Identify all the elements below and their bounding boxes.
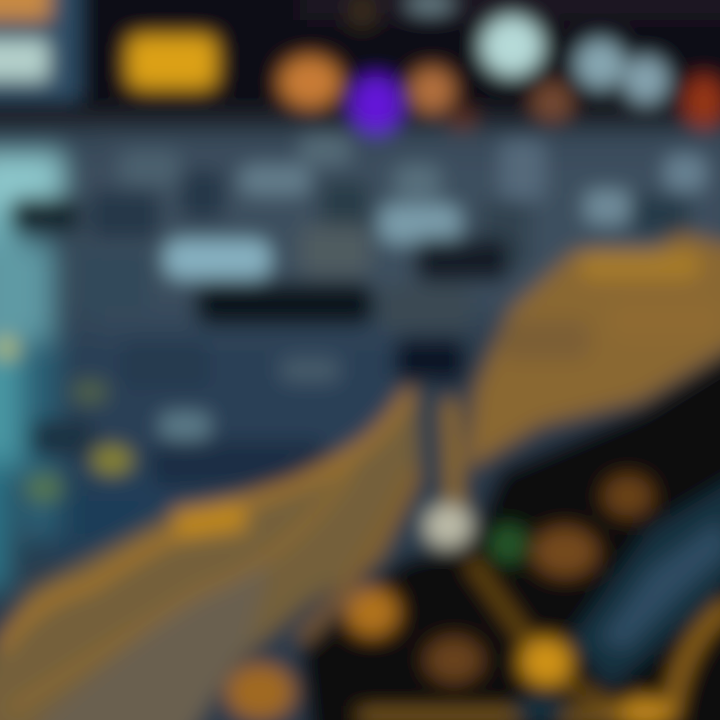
icon: orange light [280, 57, 340, 107]
icon: yellow light [128, 36, 216, 88]
icons: lower right orange dots [226, 476, 671, 720]
icon: purple light [351, 76, 401, 134]
panel: blue pipe [570, 470, 720, 690]
panel: gold diagonal lower left [0, 385, 420, 720]
panel: top band haze [0, 0, 720, 130]
icon: green spot [490, 526, 526, 562]
panel: gold right mass [465, 232, 720, 470]
icons: yellow flecks on left [0, 336, 132, 502]
panel: gold highlights right [500, 250, 720, 360]
icon: pale white light [482, 17, 542, 75]
icon: orange light 2 [410, 68, 454, 112]
icon: dim top lights [348, 0, 454, 28]
icon: red-brown light [448, 108, 476, 132]
panel: top dark band [0, 0, 720, 126]
icon: white spot [425, 505, 471, 547]
panel: brown bottom left [40, 560, 270, 720]
panel: dark lower right [300, 340, 720, 720]
panel: slate middle area [50, 130, 720, 570]
icon: red light right [684, 76, 720, 128]
panel: cyan left edge [0, 150, 65, 590]
panel: mottled patches in slate area [10, 135, 705, 488]
icon: top left screen [0, 0, 80, 100]
panel: dark blue lower edge [514, 696, 566, 720]
chart: gold streaks [0, 390, 720, 720]
icon: pale pair of lights [576, 40, 668, 103]
icon: small orange light [532, 82, 572, 122]
